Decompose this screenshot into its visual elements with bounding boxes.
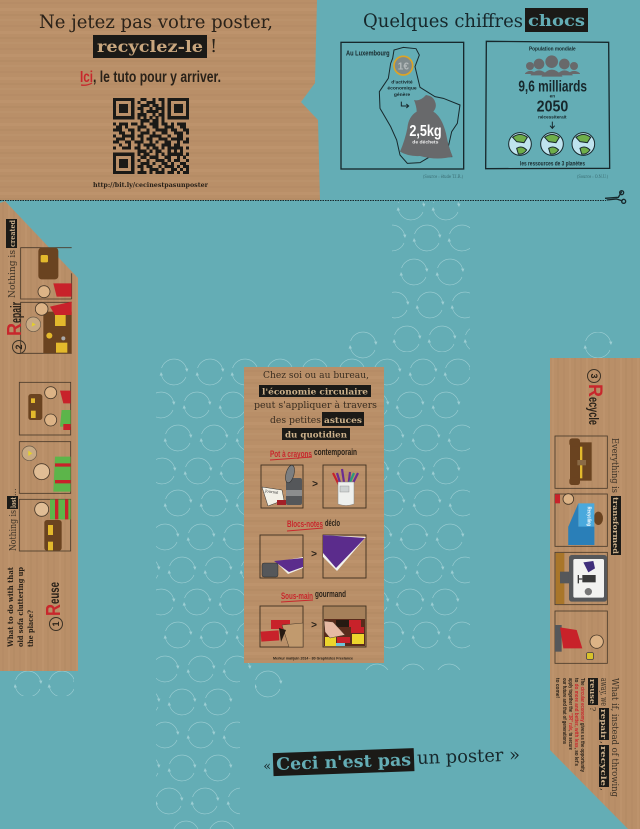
text: nothing is created: Nothing is	[8, 250, 18, 298]
figure: 2050: 2050	[537, 99, 568, 116]
figure: 2,5 kg: 2,5kg	[409, 123, 442, 140]
intro text: Chez soi ou au bureau,	[263, 370, 369, 381]
figure: 2,5 kg	[409, 123, 442, 146]
comic panel: discussion about sofa	[19, 382, 71, 435]
text: activité économique: d'activité	[391, 79, 413, 85]
text: circular economy note	[554, 678, 585, 772]
QR code	[113, 100, 189, 172]
panel: recycle	[550, 358, 640, 829]
text: nécessiterait: nécessiterait	[538, 115, 567, 120]
heading: 1 reuse: euse	[46, 582, 62, 604]
text: nothing is lost: Nothing is	[9, 510, 19, 551]
panel: population mondiale	[486, 41, 610, 169]
comic panel: sofa into container	[555, 494, 607, 546]
heading: 2 repair	[4, 302, 26, 354]
illustration: can and newspaper: Journal	[264, 489, 279, 495]
arrow: >	[311, 549, 317, 560]
heading: Blocs-notes	[287, 519, 323, 529]
text: what if instead of throwing: repair	[599, 709, 608, 739]
text: what to do with old sofa	[6, 566, 35, 648]
text: ressources de 3 planètes: les ressources de 3 planètes	[520, 161, 586, 167]
panel: everyday tips	[244, 367, 384, 663]
source: T.I.R.: (Source : étude T.I.R.)	[423, 173, 463, 180]
heading: contemporain	[314, 447, 357, 457]
illustration: cardboard and packets	[260, 606, 303, 647]
cardboard sheet	[550, 358, 640, 829]
text: activité économique	[387, 79, 417, 98]
text: nothing is lost: ...	[9, 488, 18, 496]
arrow	[401, 102, 409, 108]
comic panel: video screen	[555, 552, 607, 605]
text: circular economy note: to do more and better, with less, so let's	[573, 678, 579, 766]
cardboard sheet	[0, 201, 78, 671]
text: nothing is created: created	[8, 220, 17, 247]
heading: 1 reuse: 1	[51, 621, 61, 627]
tip: blocs-notes	[260, 518, 366, 578]
panel: recycle poster tutorial	[0, 0, 320, 200]
text: activité économique: économique	[387, 85, 417, 91]
intro text: des petites	[270, 415, 321, 426]
arrow	[550, 122, 555, 128]
comic panel: sofa into container: Recycling	[586, 507, 592, 526]
illustration: purple notepad	[323, 535, 366, 578]
text: nothing is lost	[7, 488, 19, 551]
illustration: stapler and paper	[260, 535, 303, 578]
tip: pot à crayons	[261, 447, 366, 508]
text: what if instead of throwing: ,	[598, 741, 608, 744]
highlight: recyclez-le: !	[210, 36, 217, 57]
text: what to do with old sofa: the place?	[26, 610, 35, 647]
heading: Pot à crayons	[270, 449, 312, 459]
highlight: recyclez-le	[93, 35, 217, 58]
background pattern: circular arrows	[14, 194, 612, 829]
intro text	[254, 370, 377, 440]
heading: quelques chiffres chocs	[363, 8, 588, 32]
arrow: >	[311, 620, 317, 631]
url: http://bit.ly/cecinestpasunposter	[93, 181, 209, 189]
heading: 1 reuse	[43, 582, 65, 630]
heading: 2 repair: R	[4, 323, 26, 336]
intro text: du quotidien	[285, 430, 347, 440]
figure: 9,6 milliards: 9,6 milliards	[518, 78, 587, 95]
tagline: ceci n'est pas un poster: un poster »	[417, 744, 520, 769]
heading: quelques chiffres chocs: Quelques chiffres	[363, 10, 523, 32]
text: what to do with old sofa: old sofa cluttering up	[16, 567, 25, 647]
intro text: peut s'appliquer à travers	[254, 400, 377, 411]
tip: sous-main	[260, 589, 366, 647]
icon: group of people	[525, 55, 580, 77]
text: en: en	[550, 93, 555, 98]
footer credit: Merkur mai/juin 2014 · 80 Graphistes Freelance	[273, 656, 353, 660]
icon: euro coin: 1€	[398, 61, 409, 72]
heading: ne jetez pas votre poster: Ne jetez pas votre poster,	[39, 11, 273, 33]
text: activité économique: génère	[394, 92, 410, 98]
heading: déclo	[325, 518, 340, 528]
panel: reuse and repair	[0, 201, 78, 671]
text: everything is transformed: Everything is	[609, 438, 619, 493]
heading	[270, 447, 357, 460]
map of Luxembourg	[379, 47, 460, 163]
heading: 3 recycle	[584, 370, 605, 425]
illustration: desk pad with packets	[323, 606, 366, 647]
text: what if instead of throwing: What if, instead of throwing	[609, 678, 619, 797]
tagline: ceci n'est pas un poster	[263, 744, 520, 776]
text: circular economy note: apply together the "3R" rule, to secure	[567, 678, 573, 750]
text: nothing is created	[6, 219, 18, 298]
text: what if instead of throwing: ,	[598, 788, 608, 791]
text: nothing is lost: lost	[9, 496, 18, 508]
tagline: ceci n'est pas un poster: Ceci n'est pas	[276, 750, 411, 775]
illustration: pencil pot	[323, 465, 366, 508]
text: circular economy note: to come!	[554, 678, 560, 698]
comic panel: person and old sofa	[19, 499, 71, 551]
cardboard sheet with notch	[0, 0, 320, 200]
cardboard sheet	[244, 367, 384, 663]
text: circular economy note: our future and that of generations	[561, 678, 567, 744]
text: what if instead of throwing: away, we	[598, 678, 608, 706]
comic panel: person thinking	[19, 442, 71, 493]
icons: three planets	[509, 133, 595, 155]
highlight: recyclez-le: recyclez-le	[97, 37, 203, 56]
subheading: tuto link: , le tuto pour y arriver.	[93, 69, 221, 86]
heading: Sous-main	[281, 591, 313, 601]
source: O.N.U.: (Source : O.N.U.)	[577, 173, 608, 180]
text: everything is transformed: transformed	[611, 497, 620, 554]
heading: 3 recycle: 3	[589, 373, 599, 379]
text: what if instead of throwing: ?	[588, 707, 597, 711]
heading: 3 recycle: R	[584, 384, 605, 397]
figure: 2,5 kg: de déchets	[412, 140, 439, 146]
comic panel: repairing sofa	[21, 302, 72, 353]
heading: 3 recycle: ecycle	[586, 397, 602, 425]
arrow: >	[312, 479, 318, 490]
heading	[281, 589, 346, 602]
intro text: astuces	[324, 416, 362, 426]
heading: gourmand	[315, 589, 346, 599]
heading: 1 reuse: R	[43, 604, 65, 616]
label: population mondiale: Population mondiale	[529, 46, 576, 52]
text: what if instead of throwing: reuse	[588, 679, 597, 705]
label: au Luxembourg: Au Luxembourg	[346, 49, 390, 58]
intro text: l'économie circulaire	[262, 386, 369, 398]
comic panel: old sofa	[555, 436, 607, 488]
icon: scissors	[605, 191, 626, 203]
icon: waste bag	[400, 95, 453, 159]
comic panel: couple with sofa	[21, 248, 72, 299]
text: everything is transformed	[609, 438, 621, 555]
text: what if instead of throwing: recycle	[599, 746, 608, 787]
heading: 2 repair: epair	[8, 302, 25, 323]
heading: 2 repair: 2	[14, 344, 24, 350]
text: circular economy note: The circular economy gives us the opportunity	[579, 678, 585, 772]
text: what to do with old sofa: What to do with that	[6, 566, 15, 648]
subheading: tuto link: Ici	[80, 69, 93, 86]
tagline: ceci n'est pas un poster: «	[263, 759, 271, 774]
heading: quelques chiffres chocs: chocs	[528, 11, 585, 30]
panel: au Luxembourg	[341, 42, 464, 169]
dashed cut line	[0, 200, 606, 202]
comic panel: person on chair	[555, 611, 607, 663]
text: what if instead of throwing	[588, 678, 619, 797]
